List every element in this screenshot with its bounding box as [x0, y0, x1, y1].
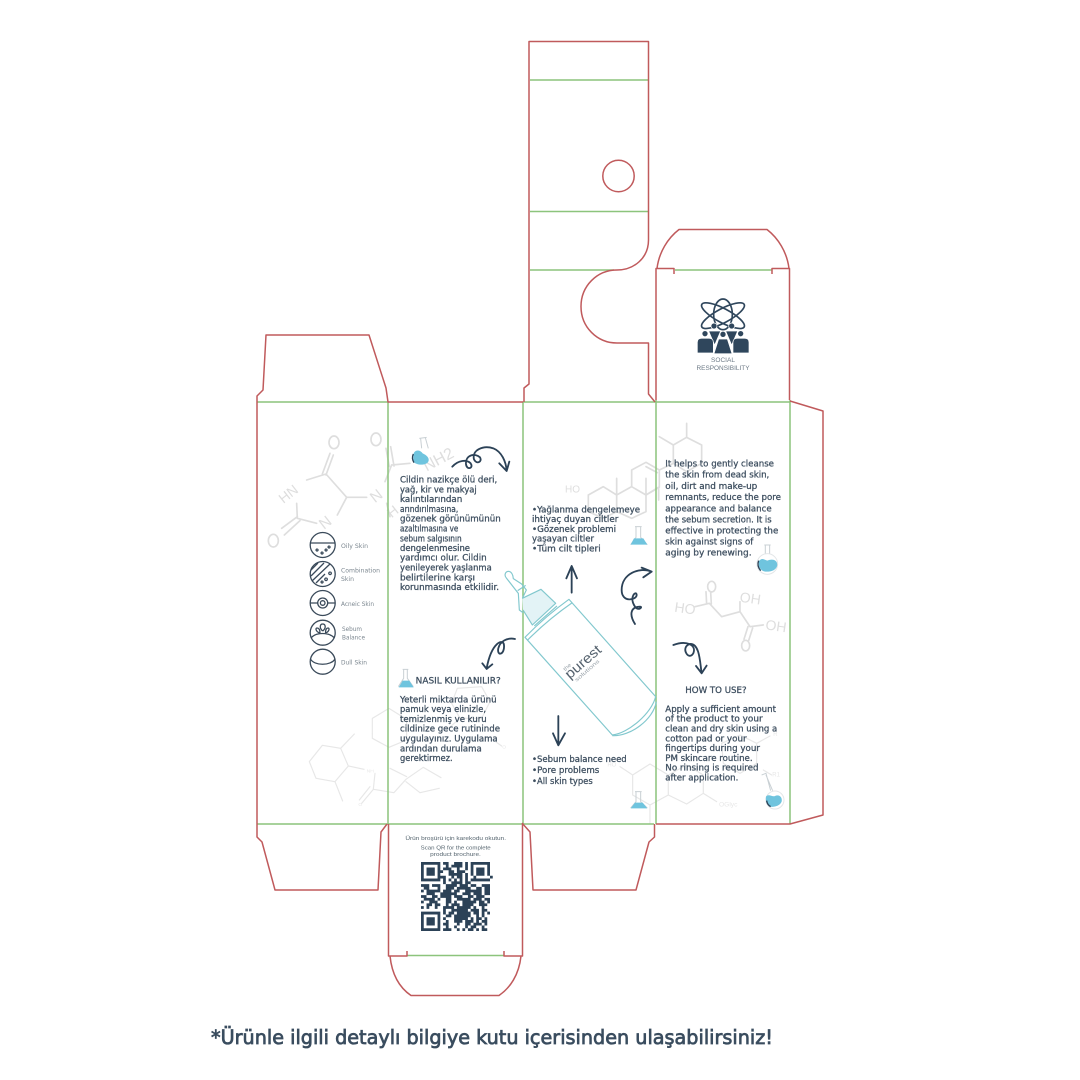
footer note: *Ürünle ilgili detaylı bilgiye kutu içerisinden ulaşabilirsiniz!: [211, 1026, 773, 1049]
molecule: malic acid watermark: OH: [739, 589, 762, 608]
text: English description: the sebum secretion. It is: [665, 515, 772, 525]
text: English description: effective in protecting the: [665, 526, 778, 536]
arrow: swirl top of panel 2: [452, 447, 509, 471]
text: English description: It helps to gently cleanse: [665, 460, 774, 470]
icon: triangular flask beside Turkish how-to: [398, 669, 414, 687]
text: Turkish description: Cildin nazikçe ölü deri,: [400, 476, 497, 486]
text: English description: appearance and balance: [665, 504, 772, 514]
text: English how to use: No rinsing is required: [665, 764, 759, 774]
icon: round flask top of panel 2: [412, 437, 429, 465]
text: Turkish how to use: cildinize gece rutininde: [400, 725, 500, 735]
molecule: left panel watermark: N: [316, 513, 335, 533]
skin type labels: Skin: [341, 575, 354, 583]
heading: how to use: HOW TO USE?: [685, 686, 747, 696]
text: English description: remnants, reduce the pore: [665, 493, 781, 503]
text: English how to use: clean and dry skin using a: [665, 725, 777, 735]
skin type labels: Oily Skin: [341, 542, 368, 550]
text: QR caption: [405, 835, 507, 858]
label: social responsibility: SOCIAL: [711, 357, 735, 364]
text: English description: aging by renewing.: [665, 549, 752, 559]
molecule: glycoside watermark: HO: [607, 763, 617, 769]
text: Turkish description: gözenek görünümünün: [400, 515, 501, 525]
text: Turkish how to use: [399, 695, 500, 764]
icon: flask beside Turkish list: [631, 527, 647, 545]
text: Turkish skin list: [532, 505, 640, 555]
icon: flask bottom of English panel: [762, 773, 784, 809]
text: Turkish how to use: Yeterli miktarda ürünü: [399, 695, 497, 705]
molecule: glycoside watermark: OGlyc: [719, 802, 738, 809]
text: Turkish skin list: •Yağlanma dengelemeye: [532, 505, 640, 515]
heading: Turkish how to use: NASIL KULLANILIR?: [416, 676, 501, 686]
arrow: up arrow: [566, 566, 577, 593]
text: English how to use: fingertips during your: [665, 744, 760, 754]
icon: oily skin: [310, 532, 335, 558]
dieline: red cut lines: [257, 42, 823, 996]
text: Turkish description: [400, 476, 501, 593]
text: English how to use: PM skincare routine.: [665, 754, 753, 764]
skin type labels: Balance: [342, 634, 365, 642]
text: Turkish description: belirtilerine karşı: [400, 573, 475, 583]
text: Turkish description: yağ, kir ve makyaj: [400, 485, 477, 495]
bottle brand text: purest: [561, 641, 604, 682]
skin type labels: Dull Skin: [341, 658, 367, 666]
icon: sebum balance: [310, 620, 335, 645]
bottle brand text: solutions: [574, 658, 601, 683]
molecule: left panel watermark: NH2: [420, 444, 457, 475]
text: Turkish description: sebum salgısının: [400, 534, 462, 544]
icon: combination skin: [310, 562, 335, 586]
text: Turkish description: dengelenmesine: [400, 544, 470, 554]
text: Turkish description: kalıntılarından: [400, 495, 462, 505]
text: Turkish description: korunmasında etkilidir.: [400, 583, 499, 593]
text: English skin list: •All skin types: [532, 777, 593, 787]
skin type labels: Sebum: [342, 625, 362, 633]
molecule: malic acid watermark: [674, 581, 788, 651]
text: English description: the skin from dead skin,: [665, 471, 769, 481]
icon: acneic skin: [310, 590, 335, 616]
skin type labels: Acneic Skin: [341, 600, 374, 608]
molecule: glycoside watermark: R: [773, 732, 778, 738]
text: English how to use: after application.: [665, 773, 738, 783]
text: English skin list: •Sebum balance need: [532, 755, 627, 765]
molecule: malic acid watermark: HO: [674, 599, 697, 618]
text: Turkish how to use: uygulayınız. Uygulama: [400, 735, 498, 745]
molecule: lidocaine watermark: O: [358, 802, 362, 808]
molecule: left panel watermark: N: [367, 486, 386, 506]
molecule: glycoside watermark: R1: [772, 773, 781, 779]
arrow: down arrow: [553, 716, 565, 745]
molecule: malic acid watermark: OH: [765, 616, 788, 635]
text: Turkish description: azaltılmasına ve: [400, 524, 458, 534]
icon: round flask in English panel: [757, 545, 778, 574]
text: English how to use: Apply a sufficient amount: [665, 705, 776, 715]
skin type labels: Combination: [341, 566, 380, 574]
text: Turkish how to use: pamuk veya elinizle,: [400, 705, 486, 715]
molecule: centre-top steroid watermark: [565, 423, 702, 518]
molecule: lidocaine watermark: [309, 687, 506, 808]
illustration: bottle: [505, 571, 656, 736]
text: Turkish how to use: temizlenmiş ve kuru: [400, 715, 487, 725]
text: QR caption: Ürün broşürü için karekodu okutun.: [405, 835, 507, 842]
bottle brand text: the: [562, 662, 573, 673]
QR code: [421, 863, 493, 930]
icon: flask bottom of panel 3: [631, 792, 647, 808]
text: English description: [665, 460, 781, 559]
skin type icons: [310, 532, 380, 674]
text: Turkish description: yenileyerek yaşlanma: [400, 564, 492, 574]
arrow: swirl above Turkish how-to: [482, 639, 515, 669]
text: Turkish skin list: •Gözenek problemi: [532, 525, 616, 535]
dieline: green fold lines: [257, 80, 790, 956]
text: Turkish skin list: yaşayan ciltler: [532, 535, 594, 545]
molecule: lidocaine watermark: O: [502, 745, 506, 751]
text: Turkish description: yardımcı olur. Cildin: [400, 554, 487, 564]
label: social responsibility: RESPONSIBILITY: [696, 365, 750, 372]
text: Turkish skin list: •Tüm cilt tipleri: [532, 545, 601, 555]
text: English how to use: [665, 705, 777, 783]
arrow: swirl to English panel: [622, 568, 652, 624]
molecule: left panel watermark: HN: [275, 481, 301, 506]
arrow: swirl to how to use: [673, 643, 707, 673]
molecule: left panel watermark: H: [384, 502, 401, 521]
molecule: left panel watermark: [268, 433, 457, 547]
icon: social responsibility: [697, 298, 749, 354]
text: English how to use: cotton pad or your: [665, 734, 747, 744]
text: English description: skin against signs of: [665, 538, 754, 548]
skin type labels: [341, 542, 380, 666]
text: Turkish how to use: gerektirmez.: [400, 754, 453, 764]
molecule: centre-top steroid watermark: HO: [565, 484, 580, 495]
text: English skin list: [532, 755, 627, 787]
text: QR caption: Scan QR for the complete: [421, 845, 491, 851]
text: English description: oil, dirt and make-up: [665, 482, 758, 492]
text: English skin list: •Pore problems: [532, 766, 600, 776]
text: Turkish description: arındırılmasına,: [400, 505, 458, 515]
label: social responsibility: [696, 357, 750, 372]
molecule: glycoside watermark: [607, 732, 781, 823]
text: Turkish how to use: ardından durulama: [400, 744, 482, 754]
text: English how to use: of the product to your: [665, 715, 763, 725]
icon: dull skin: [310, 649, 335, 674]
molecule: lidocaine watermark: NH: [367, 769, 374, 775]
text: QR caption: product brochure.: [430, 852, 481, 858]
text: Turkish skin list: ihtiyaç duyan ciltler: [532, 515, 619, 525]
